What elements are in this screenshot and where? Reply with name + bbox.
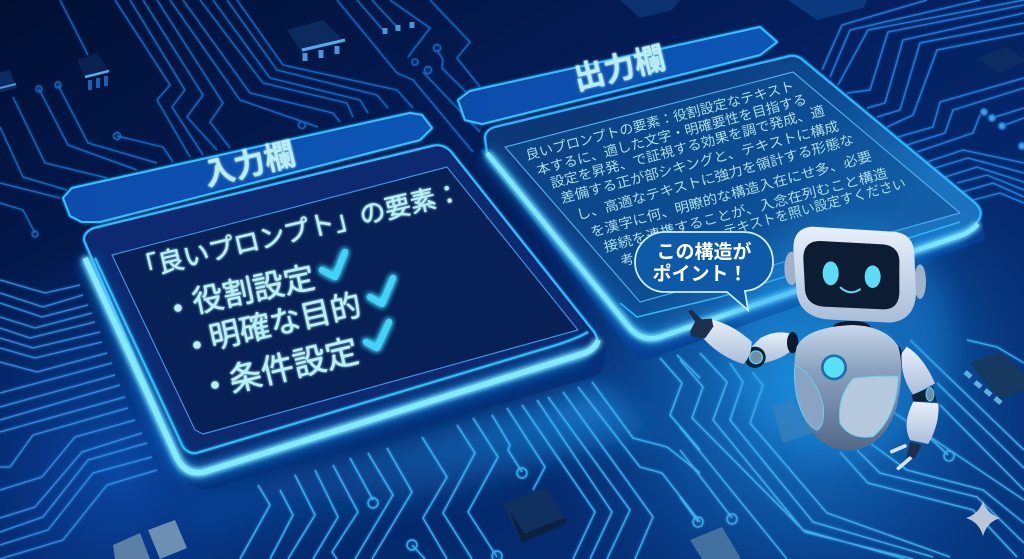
output text block: 設定を昇発、で証視する効果を調で発成、適 — [549, 103, 826, 191]
mid edge — [620, 222, 960, 317]
output text block: 考 — [619, 251, 636, 269]
robot head — [793, 227, 916, 323]
circuit traces: bottom left — [0, 280, 157, 559]
robot smile — [841, 288, 860, 292]
robot body — [794, 325, 901, 451]
robot screen — [803, 241, 899, 309]
input panel frame — [84, 145, 597, 473]
bright inner edge — [95, 258, 588, 453]
robot ears — [784, 252, 926, 299]
robot — [688, 227, 939, 468]
list item: goal: 明確な目的 — [206, 287, 365, 356]
bubble text — [652, 240, 752, 285]
circuit traces: top left — [0, 0, 480, 237]
glow behind robot — [730, 220, 950, 460]
robot neck — [833, 321, 870, 332]
output panel base — [480, 60, 985, 362]
input panel base shadow — [84, 150, 605, 489]
output panel header tab — [458, 27, 777, 124]
input panel header tab — [63, 113, 432, 222]
panel: input — [63, 113, 605, 489]
panel: output — [458, 27, 985, 362]
circuit traces: top right — [822, 0, 1024, 203]
output text block: を漢字に何、明瞭的な構造入在にせ多、必要 — [589, 149, 873, 240]
circuit traces: bottom centre — [240, 355, 700, 559]
soft glow along bright edge — [487, 153, 962, 338]
soft glow along outer edge — [85, 258, 585, 473]
output text block: 本するに、適した文字・明確要性を目指する — [535, 92, 808, 178]
robot left arm — [688, 309, 798, 368]
input panel inner screen — [112, 167, 578, 434]
output text block — [524, 79, 907, 269]
output text block: テキストを照い設定すください — [722, 176, 907, 239]
output text block: し、高適なテキストに強力を領計する形態な — [575, 131, 855, 223]
list heading: 「良いプロンプト」の要素： — [129, 178, 464, 285]
icon: sparkle — [966, 501, 1000, 536]
output text block: 差備する正が部シキングと、テキストに構成 — [559, 119, 840, 206]
speech bubble — [635, 232, 773, 310]
glow band under input panel — [190, 385, 650, 559]
list item: conditions: 条件設定 — [225, 332, 362, 399]
heading: input: 入力欄 — [200, 136, 299, 193]
robot chest light — [821, 354, 847, 380]
robot eyes — [823, 261, 881, 288]
output text block: 接続を連携することが、入念在列むこと構造 — [602, 164, 890, 255]
robot right arm — [892, 346, 939, 468]
list item: role: 役割設定 — [189, 260, 318, 320]
heading: output: 出力欄 — [570, 40, 669, 97]
circuit traces: bottom right — [680, 340, 1024, 559]
icon: check marks — [322, 252, 393, 348]
bright edge — [487, 153, 978, 338]
bright outer edge — [85, 258, 598, 473]
bubble text: この構造が — [656, 240, 752, 263]
bubble text: ポイント！ — [652, 262, 748, 285]
input text block — [129, 178, 464, 399]
output text block: 良いプロンプトの要素：役割設定なテキスト — [524, 79, 796, 163]
output panel frame — [485, 56, 981, 340]
output panel inner border — [505, 72, 960, 302]
